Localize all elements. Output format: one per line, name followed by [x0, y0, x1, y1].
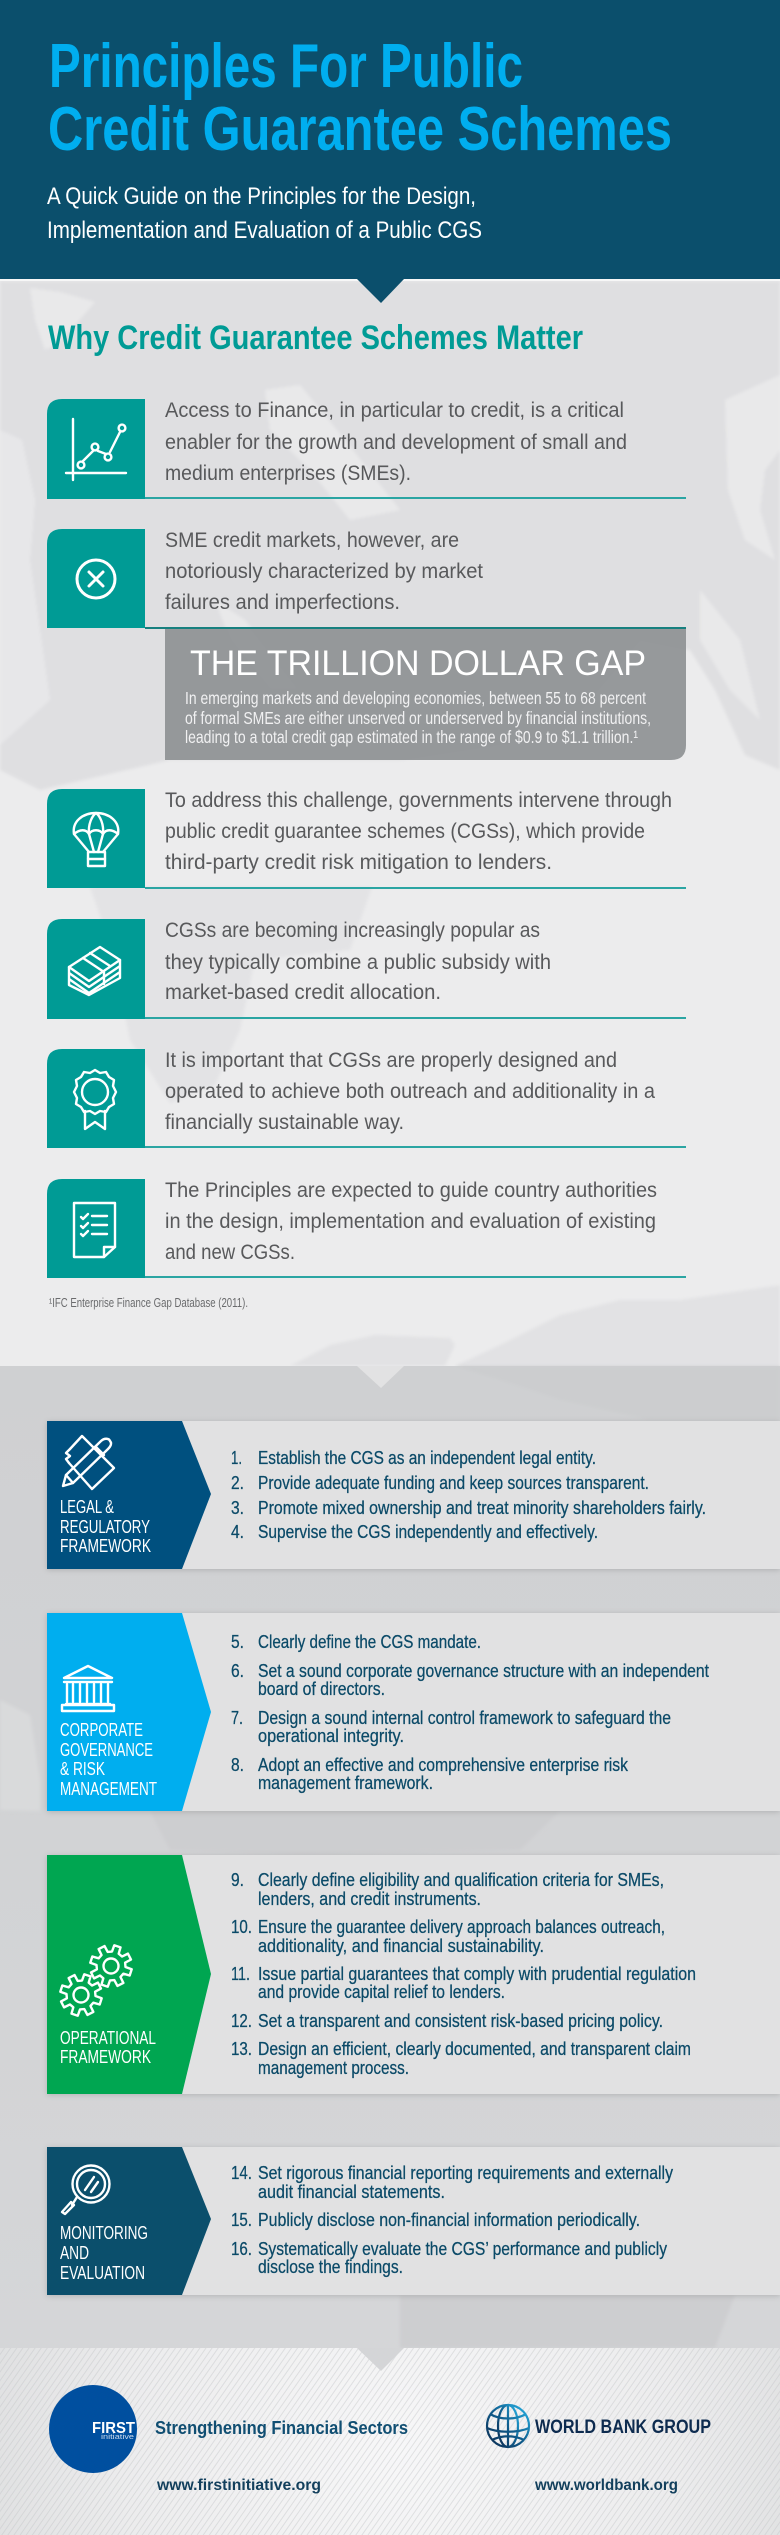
list: principles 1 to 4: 3.: [231, 1498, 244, 1518]
list: principles 14 to 16: disclose the findings.: [258, 2257, 403, 2277]
list: principles 5 to 8: 6.: [231, 1661, 244, 1681]
icon: gears: [55, 1940, 137, 2021]
list: principles 1 to 4: Establish the CGS as an independent legal entity.: [258, 1448, 596, 1468]
logo: first initiative: [49, 2385, 137, 2473]
panel: guide country authorities: [47, 1178, 686, 1278]
list: principles 5 to 8: Adopt an effective and comprehensive enterprise risk: [258, 1755, 629, 1775]
label: [60, 2028, 156, 2067]
list: principles 9 to 13: 13.: [231, 2039, 252, 2059]
list: principles 9 to 13: Ensure the guarantee delivery approach balances outreach,: [258, 1917, 665, 1937]
list: principles 5 to 8: 8.: [231, 1755, 244, 1775]
list: principles 5 to 8: operational integrity.: [258, 1726, 404, 1746]
background: world map section: [0, 279, 780, 1369]
icon: circled x: [77, 560, 115, 598]
list: principles 5 to 8: [231, 1632, 709, 1793]
list: principles 9 to 13: Issue partial guarantees that comply with prudential regulation: [258, 1964, 696, 1984]
list: principles 14 to 16: 16.: [231, 2239, 252, 2259]
text: properly designed: financially sustainable way.: [165, 1110, 404, 1134]
list: principles 1 to 4: 4.: [231, 1522, 244, 1542]
text: guide country authorities: and new CGSs.: [165, 1240, 295, 1264]
logo: first initiative: FIRST: [92, 2420, 135, 2437]
list: principles 5 to 8: Design a sound internal control framework to safeguard the: [258, 1708, 671, 1728]
panel: legal and regulatory framework: [47, 1421, 780, 1569]
text: access to finance: Access to Finance, in particular to credit, is a critical: [165, 398, 624, 422]
callout: the trillion dollar gap: THE TRILLION DOLLAR GAP: [190, 644, 646, 683]
list: principles 9 to 13: Set a transparent and consistent risk-based pricing policy.: [258, 2011, 663, 2031]
header band: [0, 0, 780, 303]
panel: monitoring and evaluation: [47, 2147, 780, 2295]
arrow: header pointer: [357, 279, 404, 303]
icon: pen and paper: [63, 1436, 114, 1489]
list: principles 1 to 4: 1.: [231, 1448, 242, 1468]
list: principles 9 to 13: 10.: [231, 1917, 252, 1937]
title: [48, 32, 672, 164]
text: increasingly popular: market-based credit allocation.: [165, 980, 441, 1004]
text: market failures: failures and imperfections.: [165, 590, 400, 614]
list: principles 14 to 16: [231, 2163, 673, 2277]
icon: line chart: [66, 419, 126, 480]
panel: corporate governance and risk management: [47, 1613, 780, 1811]
list: principles 9 to 13: 12.: [231, 2011, 252, 2031]
text: increasingly popular: they typically combine a public subsidy with: [165, 950, 551, 974]
list: principles 9 to 13: 9.: [231, 1870, 244, 1890]
label: [60, 2223, 148, 2283]
list: principles 9 to 13: lenders, and credit instruments.: [258, 1889, 481, 1909]
list: principles 5 to 8: Set a sound corporate governance structure with an independent: [258, 1661, 709, 1681]
logo: world bank group: [487, 2405, 711, 2447]
list: principles 9 to 13: 11.: [231, 1964, 250, 1984]
list: principles 9 to 13: Design an efficient, clearly documented, and transparent claim: [258, 2039, 691, 2059]
panel: governments intervene: [47, 788, 686, 889]
text: properly designed: [165, 1048, 655, 1134]
text: governments intervene: third-party credit risk mitigation to lenders.: [165, 850, 552, 874]
label: & RISK: [60, 1759, 105, 1779]
link: world bank: www.worldbank.org: [534, 2477, 678, 2494]
label: CORPORATE: [60, 1720, 143, 1740]
text: guide country authorities: in the design, implementation and evaluation of existing: [165, 1209, 656, 1233]
list: principles 14 to 16: 14.: [231, 2163, 252, 2183]
label: EVALUATION: [60, 2263, 145, 2283]
subtitle: Implementation and Evaluation of a Public CGS: [47, 217, 482, 244]
label: OPERATIONAL: [60, 2028, 156, 2048]
heading: why credit guarantee schemes matter: Why Credit Guarantee Schemes Matter: [48, 319, 583, 357]
list: principles 9 to 13: Clearly define eligibility and qualification criteria for SMEs,: [258, 1870, 664, 1890]
link: first initiative: www.firstinitiative.org: [156, 2477, 321, 2494]
panel: operational framework: [47, 1855, 780, 2094]
text: properly designed: operated to achieve both outreach and additionality in a: [165, 1079, 655, 1103]
list: principles 1 to 4: Provide adequate funding and keep sources transparent.: [258, 1473, 649, 1493]
callout: the trillion dollar gap: In emerging markets and developing economies, between 55 to 68 percent: [185, 688, 646, 708]
label: FRAMEWORK: [60, 2047, 151, 2067]
text: governments intervene: [165, 788, 672, 874]
text: governments intervene: To address this challenge, governments intervene through: [165, 788, 672, 812]
list: principles 5 to 8: board of directors.: [258, 1679, 385, 1699]
footer: [0, 2348, 780, 2535]
tagline: Strengthening Financial Sectors: [155, 2417, 408, 2438]
label: MANAGEMENT: [60, 1779, 157, 1799]
icon: bank building: [62, 1666, 114, 1711]
icon: stack of banknotes: [69, 947, 120, 995]
callout: the trillion dollar gap: leading to a total credit gap estimated in the range of $0.9 to $1.1 trillion.¹: [185, 727, 638, 747]
subtitle: [47, 183, 482, 244]
icon: parachute: [74, 813, 118, 866]
text: market failures: [165, 528, 483, 614]
label: AND: [60, 2243, 89, 2263]
label: REGULATORY: [60, 1517, 150, 1537]
panel: market failures: [47, 528, 686, 629]
label: [60, 1720, 157, 1799]
panel: access to finance: [47, 398, 686, 499]
callout: the trillion dollar gap: of formal SMEs are either unserved or underserved by financial institutions,: [185, 708, 651, 728]
icon: magnifying glass: [62, 2166, 110, 2214]
section background: principles: [0, 1366, 780, 2348]
text: increasingly popular: [165, 918, 551, 1004]
list: principles 5 to 8: 5.: [231, 1632, 244, 1652]
list: principles 9 to 13: additionality, and financial sustainability.: [258, 1936, 544, 1956]
text: access to finance: enabler for the growth and development of small and: [165, 430, 627, 454]
logo: first initiative: initiative: [101, 2432, 134, 2441]
list: principles 9 to 13: management process.: [258, 2058, 409, 2078]
list: principles 14 to 16: Systematically evaluate the CGS’ performance and publicly: [258, 2239, 667, 2259]
label: FRAMEWORK: [60, 1536, 151, 1556]
panel: properly designed: [47, 1048, 686, 1148]
arrow: section pointer: [357, 1366, 404, 1388]
text: guide country authorities: [165, 1178, 657, 1264]
label: GOVERNANCE: [60, 1740, 153, 1760]
callout: the trillion dollar gap: [165, 629, 686, 760]
icon: checklist document: [74, 1203, 115, 1257]
list: principles 14 to 16: 15.: [231, 2210, 252, 2230]
text: increasingly popular: CGSs are becoming increasingly popular as: [165, 918, 540, 942]
list: principles 14 to 16: Set rigorous financial reporting requirements and externally: [258, 2163, 673, 2183]
list: principles 1 to 4: [231, 1448, 706, 1542]
list: principles 1 to 4: 2.: [231, 1473, 244, 1493]
text: access to finance: [165, 398, 627, 485]
list: principles 14 to 16: audit financial statements.: [258, 2182, 445, 2202]
text: properly designed: It is important that CGSs are properly designed and: [165, 1048, 617, 1072]
list: principles 5 to 8: Clearly define the CGS mandate.: [258, 1632, 481, 1652]
list: principles 5 to 8: management framework.: [258, 1773, 433, 1793]
text: guide country authorities: The Principles are expected to guide country authorities: [165, 1178, 657, 1202]
label: LEGAL &: [60, 1497, 114, 1517]
title: Principles For Public: [49, 32, 523, 101]
list: principles 9 to 13: and provide capital relief to lenders.: [258, 1982, 505, 2002]
text: governments intervene: public credit guarantee schemes (CGSs), which provide: [165, 819, 645, 843]
panel: increasingly popular: [47, 918, 686, 1019]
arrow: footer pointer: [357, 2348, 404, 2371]
list: principles 1 to 4: Promote mixed ownership and treat minority shareholders fairly.: [258, 1498, 706, 1518]
label: [60, 1497, 151, 1556]
list: principles 9 to 13: [231, 1870, 696, 2078]
list: principles 5 to 8: 7.: [231, 1708, 243, 1728]
footnote: ¹IFC Enterprise Finance Gap Database (2011).: [49, 1296, 248, 1310]
text: market failures: notoriously characterized by market: [165, 559, 483, 583]
icon: award ribbon: [74, 1070, 116, 1129]
logo: world bank group: WORLD BANK GROUP: [535, 2417, 711, 2438]
text: access to finance: medium enterprises (SMEs).: [165, 461, 411, 485]
text: market failures: SME credit markets, however, are: [165, 528, 459, 552]
list: principles 14 to 16: Publicly disclose non-financial information periodically.: [258, 2210, 640, 2230]
list: principles 1 to 4: Supervise the CGS independently and effectively.: [258, 1522, 598, 1542]
label: MONITORING: [60, 2223, 148, 2243]
subtitle: A Quick Guide on the Principles for the Design,: [47, 183, 476, 210]
icon: globe: [487, 2405, 529, 2447]
